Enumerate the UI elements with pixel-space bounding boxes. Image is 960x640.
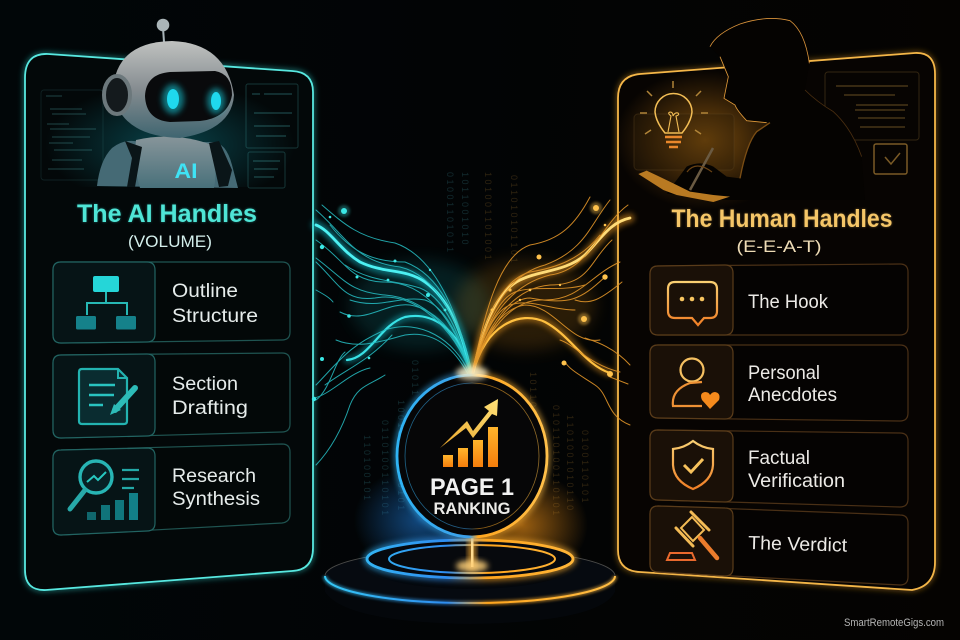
base ring glow xyxy=(325,576,615,603)
robot arm joints xyxy=(125,141,232,187)
icon cell xyxy=(53,448,155,535)
particles xyxy=(490,202,613,377)
base ring xyxy=(325,576,615,603)
icon: magnifier and bars xyxy=(70,461,139,520)
mini screen: code xyxy=(41,90,103,180)
robot scene glow xyxy=(45,83,295,207)
icon: shield check xyxy=(673,441,713,489)
row: the hook xyxy=(650,264,908,335)
mini screen: notes xyxy=(825,72,919,140)
binary code rain: 0 1 0 1 1 xyxy=(410,360,420,395)
binary code rain: 0 1 0 1 1 0 1 0 0 1 1 0 1 0 1 xyxy=(551,405,561,515)
binary code rain: 0 1 1 0 1 0 1 0 1 1 0 1 xyxy=(509,175,519,263)
pen xyxy=(690,148,713,190)
page 1 text: PAGE 1 xyxy=(430,474,514,501)
panel: the AI handles xyxy=(25,19,313,590)
platform base xyxy=(325,576,615,624)
label: Drafting xyxy=(172,398,248,419)
label: Section xyxy=(172,374,238,395)
growth chart icon xyxy=(440,399,498,467)
outer ring glow xyxy=(367,540,573,578)
blue light column xyxy=(354,466,486,574)
binary code rain: 1 0 1 0 0 1 1 0 1 0 0 1 xyxy=(483,172,493,260)
subheading: (E-E-A-T) xyxy=(736,237,822,256)
icon: speech bubble xyxy=(668,282,717,325)
label: Outline xyxy=(172,281,238,302)
main stream xyxy=(316,225,471,373)
eye glow xyxy=(162,84,184,114)
antenna ball xyxy=(157,19,169,31)
streams: cyan flow xyxy=(312,205,490,465)
binary code rain: 1 1 0 1 0 0 1 0 1 xyxy=(362,435,372,500)
label: Personal xyxy=(748,363,820,384)
heading: The Human Handles xyxy=(672,205,892,233)
right eye glow xyxy=(207,88,225,114)
label: Structure xyxy=(172,306,258,327)
badge disc xyxy=(397,375,547,537)
heading: The AI Handles xyxy=(77,200,257,228)
main stream xyxy=(473,218,630,373)
orange light column xyxy=(456,471,588,579)
robot head xyxy=(113,41,234,138)
icon cell xyxy=(650,506,733,576)
icon: lightbulb xyxy=(640,81,708,147)
lower stream glow xyxy=(473,318,610,373)
junction haze xyxy=(350,260,490,350)
row: the verdict xyxy=(650,506,908,585)
label: Anecdotes xyxy=(748,385,837,406)
panel frame glow xyxy=(618,53,935,590)
icon cell xyxy=(53,262,155,343)
row: section drafting xyxy=(53,353,290,438)
outer ring xyxy=(367,540,573,578)
binary code rain: 0 1 1 0 1 0 0 1 1 0 1 0 1 xyxy=(380,420,390,515)
icon cell xyxy=(650,430,733,502)
label: Synthesis xyxy=(172,489,260,510)
badge glow xyxy=(397,375,547,537)
binary code rain: 1 1 0 1 0 0 1 0 1 0 1 1 0 xyxy=(565,415,575,510)
person silhouette xyxy=(667,18,865,200)
inner ring xyxy=(405,383,539,529)
platform xyxy=(325,466,615,624)
label: Verification xyxy=(748,471,845,492)
icon: person with heart xyxy=(673,358,720,409)
binary code rain: 1 0 0 1 1 0 1 0 1 1 0 0 1 0 1 xyxy=(396,400,406,510)
flow entry flare xyxy=(456,366,488,380)
robot visor xyxy=(145,71,232,122)
mini screen: form xyxy=(246,84,298,188)
main stream glow xyxy=(316,225,471,373)
panel frame xyxy=(25,54,313,590)
robot torso xyxy=(135,136,216,188)
mid disc xyxy=(367,541,573,589)
icon: gavel xyxy=(667,512,717,560)
binary code rain: 1 0 1 1 0 0 1 0 1 0 xyxy=(460,172,470,245)
scene lower fade xyxy=(27,187,311,211)
antenna xyxy=(163,28,164,42)
base disc xyxy=(325,549,615,603)
row: research synthesis xyxy=(53,444,290,535)
checkbox xyxy=(874,144,907,174)
hand rim xyxy=(687,166,712,172)
panel frame xyxy=(618,53,935,590)
binary code rain: 0 1 0 0 1 1 0 1 0 1 xyxy=(580,430,590,503)
label: Research xyxy=(172,466,256,487)
icon: org chart xyxy=(76,276,136,330)
main stream glow xyxy=(473,218,630,373)
heading glow: The AI Handles xyxy=(77,200,257,228)
AI chest label: AI xyxy=(174,160,198,183)
inner ring xyxy=(389,545,555,573)
panel: the human handles xyxy=(615,18,935,590)
streams: orange flow xyxy=(455,197,630,425)
junction haze xyxy=(455,260,595,350)
row: personal anecdotes xyxy=(650,345,908,421)
right eye xyxy=(211,92,221,110)
label: The Verdict xyxy=(748,533,848,557)
thin strands xyxy=(314,205,471,465)
watermark: SmartRemoteGigs.com xyxy=(844,617,944,629)
ranking text: RANKING xyxy=(434,500,510,518)
icon cell xyxy=(650,265,733,335)
open notebook xyxy=(638,171,730,202)
particles xyxy=(312,205,446,401)
lower stream xyxy=(347,316,471,373)
row: factual verification xyxy=(650,430,908,507)
row: outline structure xyxy=(53,262,290,343)
binary code rain xyxy=(362,172,590,515)
icon: document and pen xyxy=(79,369,135,424)
faded screen behind bulb xyxy=(634,114,734,170)
panel frame glow xyxy=(25,54,313,590)
left eye xyxy=(167,89,179,109)
base top rim xyxy=(325,549,615,576)
lower stream xyxy=(473,318,610,373)
heading glow: The Human Handles xyxy=(672,205,892,233)
beam xyxy=(471,535,474,567)
lower stream glow xyxy=(347,316,471,373)
label: Factual xyxy=(748,448,810,469)
beam glow xyxy=(468,530,476,570)
robot shoulders xyxy=(97,141,238,188)
beam flare xyxy=(456,560,488,572)
thin strands xyxy=(473,197,630,425)
robot ear xyxy=(104,76,130,114)
icon cell xyxy=(650,345,733,419)
icon cell xyxy=(53,354,155,438)
warm glow behind scene xyxy=(615,70,795,210)
badge: page 1 ranking xyxy=(397,366,547,537)
binary code rain: 0 1 0 0 1 1 0 1 0 1 1 xyxy=(445,172,455,252)
robot xyxy=(97,19,238,188)
binary code rain: 1 0 1 1 0 xyxy=(528,372,538,407)
subheading: (VOLUME) xyxy=(128,232,212,251)
label: The Hook xyxy=(748,292,828,313)
